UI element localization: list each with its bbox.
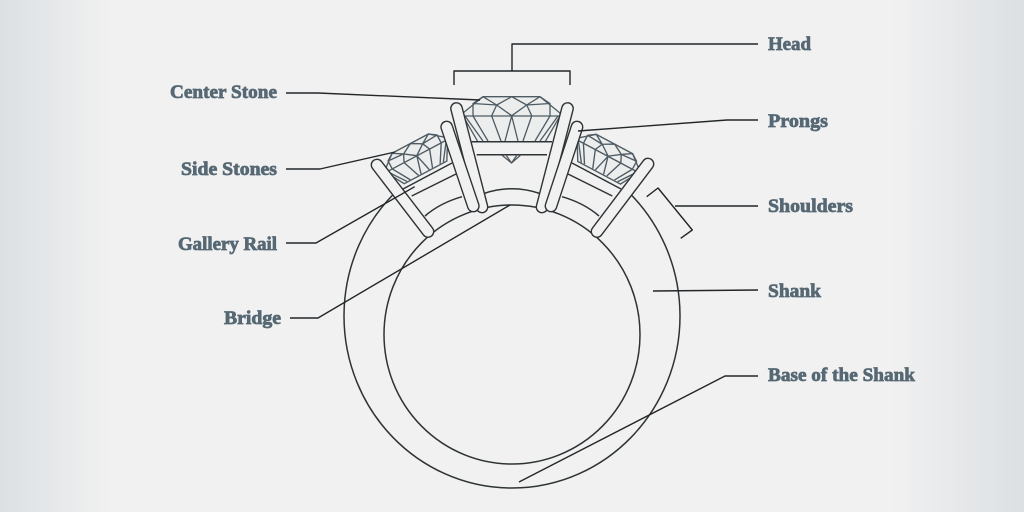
label: Prongs: Prongs	[768, 111, 828, 132]
prong center right back	[542, 108, 568, 207]
label: Head: Head	[768, 34, 811, 55]
shank inner edge	[384, 205, 640, 464]
prong outer right	[597, 164, 648, 232]
bridge	[484, 189, 540, 194]
side stone right	[568, 128, 645, 189]
gallery right	[544, 163, 621, 232]
gallery left	[403, 163, 480, 232]
side stone left	[379, 127, 456, 189]
base of the shank leader	[519, 376, 758, 482]
label: Side Stones: Side Stones	[181, 159, 277, 180]
label: Gallery Rail: Gallery Rail	[178, 234, 277, 255]
label: Bridge: Bridge	[224, 308, 281, 329]
prong outer left	[377, 165, 428, 232]
shank leader	[653, 290, 758, 291]
shoulders bracket and leader	[647, 188, 758, 238]
center stone leader	[286, 93, 480, 100]
label: Center Stone: Center Stone	[170, 82, 277, 103]
prong center left back	[456, 108, 482, 207]
prongs leader	[578, 120, 758, 131]
ring illustration	[344, 97, 680, 488]
center stone	[463, 97, 560, 142]
side stones leader	[286, 152, 395, 169]
prong inner left	[447, 127, 473, 206]
center gallery rail	[470, 142, 554, 202]
culet	[502, 155, 521, 163]
label: Shank: Shank	[768, 281, 821, 302]
prong inner right	[551, 127, 577, 206]
head bracket and leader	[454, 44, 758, 85]
label: Shoulders: Shoulders	[768, 196, 853, 217]
shank outer edge	[344, 193, 680, 488]
bridge leader	[290, 205, 510, 318]
gallery rail leader	[286, 187, 415, 243]
label: Base of the Shank: Base of the Shank	[768, 365, 915, 386]
